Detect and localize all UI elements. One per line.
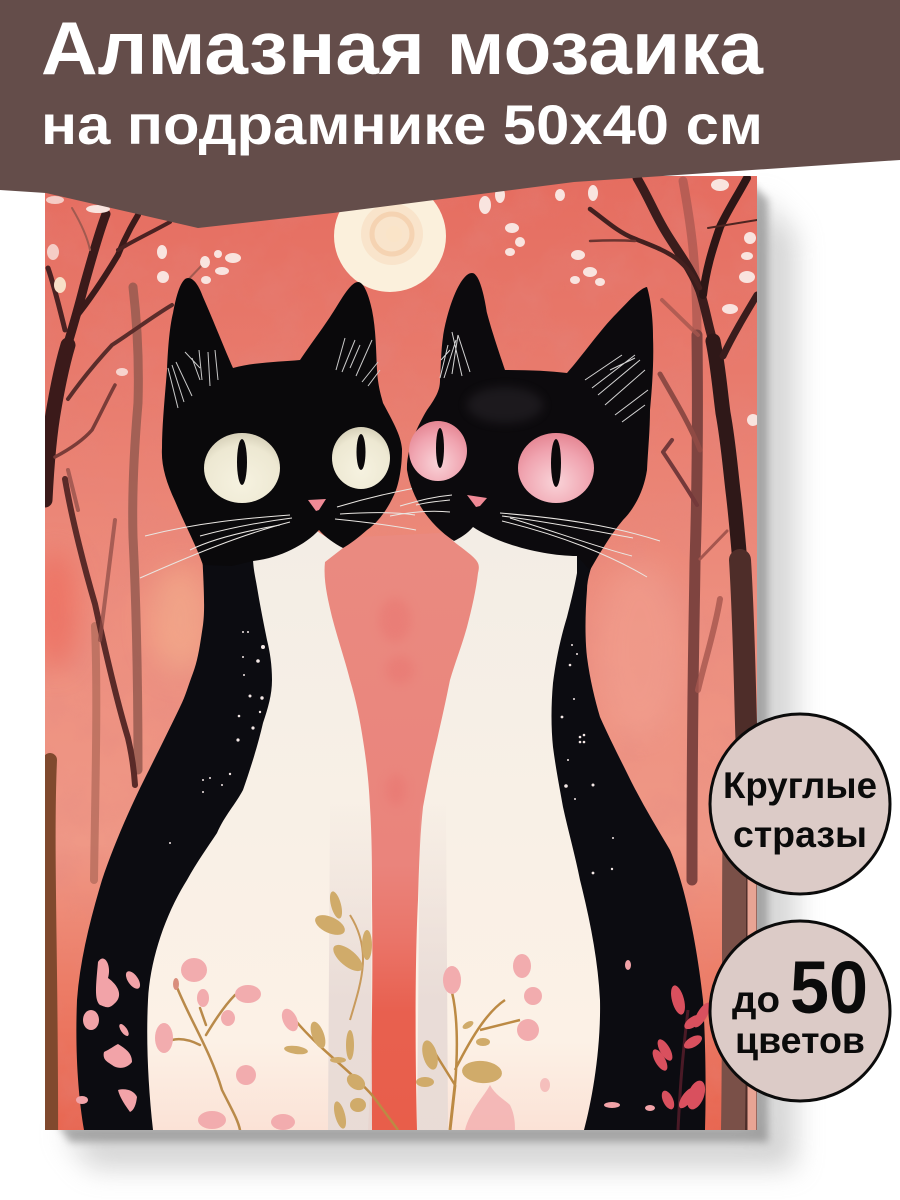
left cat body bbox=[76, 561, 272, 1130]
cat: right bbox=[390, 273, 706, 1130]
right cat ear fur bbox=[440, 332, 648, 422]
badge: round rhinestones: стразы bbox=[733, 814, 867, 855]
canvas artwork bbox=[33, 176, 759, 1160]
title: Алмазная мозаика bbox=[41, 6, 764, 90]
badge: up to 50 colors: до bbox=[732, 979, 780, 1020]
left trees bbox=[45, 208, 205, 1160]
right trees and side stripes bbox=[590, 178, 757, 1130]
painted background bbox=[45, 176, 757, 1130]
watercolor mottling bbox=[62, 1072, 79, 1102]
right cat forehead sheen bbox=[467, 387, 543, 423]
badge: round rhinestones: Круглые bbox=[723, 765, 877, 806]
left cat bottom branch bbox=[172, 985, 240, 1130]
left cat blossoms bbox=[155, 958, 295, 1130]
right cat white belly bbox=[416, 520, 600, 1130]
left cat belly shadow strip bbox=[328, 874, 372, 1130]
left cat whiskers bbox=[140, 487, 420, 578]
right cat head bbox=[407, 273, 653, 570]
right cat nose bbox=[467, 495, 487, 507]
left cat eye: left bbox=[204, 433, 280, 503]
white blossoms bbox=[46, 179, 759, 426]
subtitle: на подрамнике 50х40 см bbox=[41, 93, 763, 156]
badge: up to 50 colors: цветов bbox=[735, 1020, 865, 1061]
badge: up to 50 colors: 50 bbox=[790, 946, 868, 1029]
badge: up to 50 colors bbox=[710, 921, 890, 1101]
left cat ear fur bbox=[168, 338, 380, 408]
left cat nose bbox=[308, 499, 326, 511]
left cat head bbox=[162, 278, 402, 566]
pink petals on left cat bbox=[76, 958, 143, 1112]
right cat blossoms bbox=[279, 954, 550, 1130]
right cat body bbox=[552, 556, 706, 1130]
center gap between cats bbox=[343, 537, 456, 1130]
moon bbox=[334, 200, 446, 292]
right cat dark pink leaves bbox=[604, 960, 713, 1130]
canvas drop shadow bbox=[58, 182, 795, 1168]
right cat eye: left bbox=[409, 421, 467, 481]
gap blush bbox=[384, 603, 408, 796]
left cat white belly bbox=[147, 520, 372, 1130]
cat: left bbox=[76, 278, 420, 1130]
soft washes bbox=[33, 550, 685, 740]
right cat eye: right bbox=[518, 433, 594, 503]
header banner bbox=[0, 0, 900, 228]
badge: round rhinestones bbox=[710, 714, 890, 894]
stars on black fur bbox=[169, 631, 614, 874]
right cat belly shadow strip bbox=[417, 800, 448, 1130]
right cat whiskers bbox=[390, 495, 660, 577]
center gold branches bbox=[284, 890, 520, 1130]
left cat eye: right bbox=[332, 427, 390, 489]
